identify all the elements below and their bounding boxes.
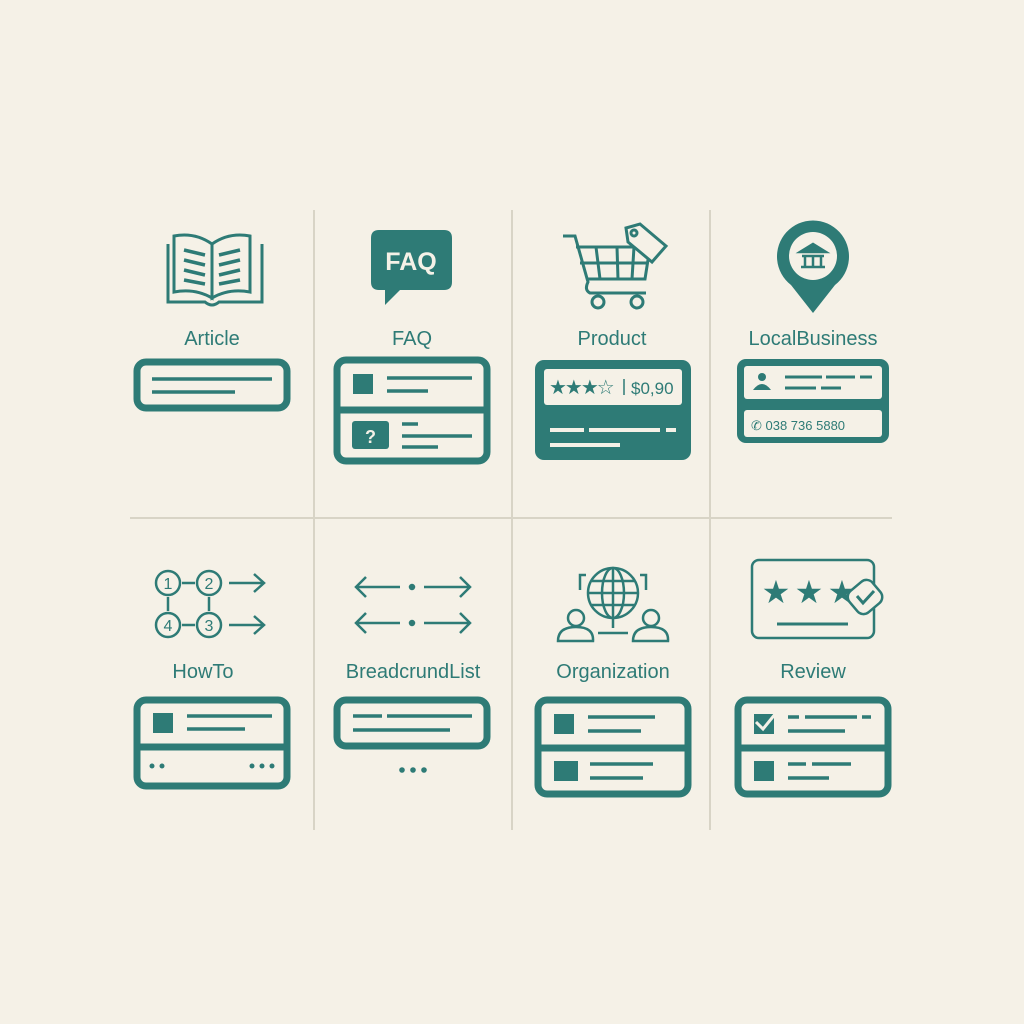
icon: numbered steps: 2 — [205, 576, 214, 593]
label: FAQ: FAQ — [392, 328, 432, 350]
icon: numbered steps: 3 — [205, 618, 214, 635]
label: LocalBusiness: LocalBusiness — [749, 328, 877, 350]
card: Review — [738, 700, 888, 794]
card: Article — [137, 362, 287, 408]
card: LocalBusiness: ✆ 038 736 5880 — [751, 418, 845, 433]
panel: Product — [535, 224, 691, 460]
icon: review card with stars: ★ — [795, 574, 823, 610]
panel: Article — [137, 235, 287, 408]
card: HowTo — [137, 700, 287, 786]
panel: BreadcrumbList — [337, 577, 487, 773]
label: Organization: Organization — [556, 661, 670, 683]
icon: review card with stars: ★ — [762, 574, 790, 610]
icon: location pin — [777, 221, 849, 313]
label: Review: Review — [780, 661, 846, 683]
icon: shopping cart with tag — [563, 224, 666, 308]
icon: numbered steps — [156, 571, 264, 637]
icon: open book — [168, 235, 262, 305]
icon: numbered steps: 1 — [164, 576, 173, 593]
icon: FAQ bubble — [371, 230, 452, 305]
card: BreadcrumbList — [337, 700, 487, 746]
icon: numbered steps: 4 — [164, 618, 173, 635]
panel: FAQ — [337, 230, 487, 461]
card: LocalBusiness — [737, 359, 889, 443]
panel: Review — [738, 560, 888, 794]
panel: Organization — [538, 568, 688, 794]
icon: bidirectional arrows — [356, 577, 470, 633]
label: BreadcrumbList: BreadcrundList — [346, 661, 481, 683]
icon: FAQ bubble: FAQ — [385, 248, 437, 276]
label: Article: Article — [184, 328, 240, 350]
label: Product: Product — [578, 328, 647, 350]
card: Product — [535, 360, 691, 460]
dots — [399, 767, 427, 773]
card: Product: ★★★☆ — [549, 377, 614, 399]
card: Organization — [538, 700, 688, 794]
card: Product: $0,90 — [631, 379, 674, 398]
card: FAQ — [337, 360, 487, 461]
icon: review card with stars: ★ — [828, 574, 856, 610]
label: HowTo: HowTo — [172, 661, 234, 683]
panel: LocalBusiness — [737, 221, 889, 443]
icon: review card with stars — [752, 560, 885, 638]
card: FAQ: ? — [365, 427, 376, 447]
panel: HowTo — [137, 571, 287, 786]
icon: globe with people — [558, 568, 668, 641]
